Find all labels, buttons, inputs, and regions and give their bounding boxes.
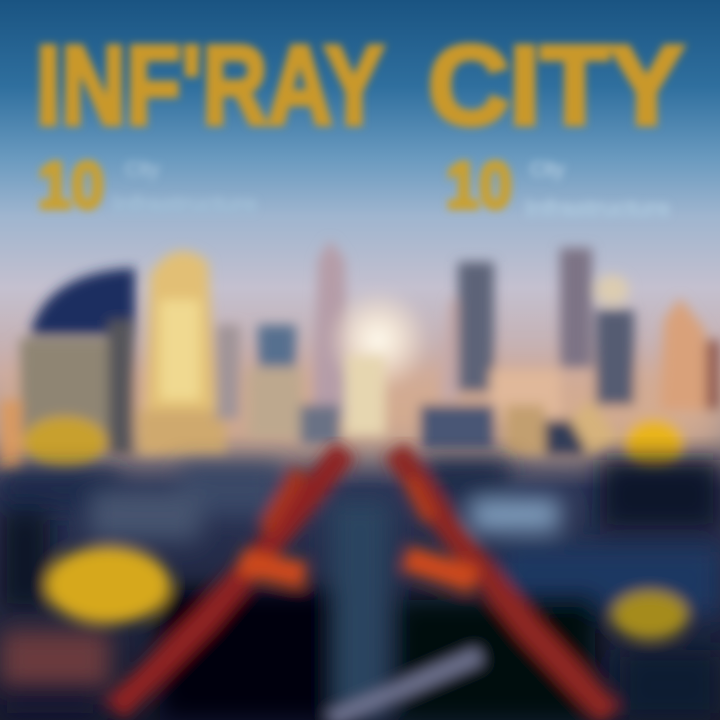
building: dark towers right [440,248,720,420]
building: small towers [216,325,302,438]
stat left: 10 [38,148,104,222]
haze behind buildings [0,370,720,450]
yellow taxi right [612,591,688,639]
low buildings [300,400,620,455]
sun glow [326,288,430,392]
dark vehicles [0,460,720,720]
stat left [38,148,257,222]
yellow taxi left [46,547,170,623]
light trail bottom [330,655,480,720]
stat right: City [530,159,564,181]
title: INF'RAY [36,23,384,148]
stat right: 10 [446,148,512,222]
stat left: City [125,159,159,181]
skyline [0,240,720,471]
street foreground [0,450,720,720]
building: left dark dome [0,268,135,470]
title [36,23,684,148]
title: CITY [428,23,684,148]
yellow glow right [624,419,684,471]
stat right [446,148,670,222]
stat left: Infrastructure [112,192,257,217]
highlight vehicle [470,498,560,532]
building: central spire [312,240,350,420]
building: golden tower [138,251,226,455]
red road [115,450,610,715]
stat right: Infrastructure [525,196,670,221]
